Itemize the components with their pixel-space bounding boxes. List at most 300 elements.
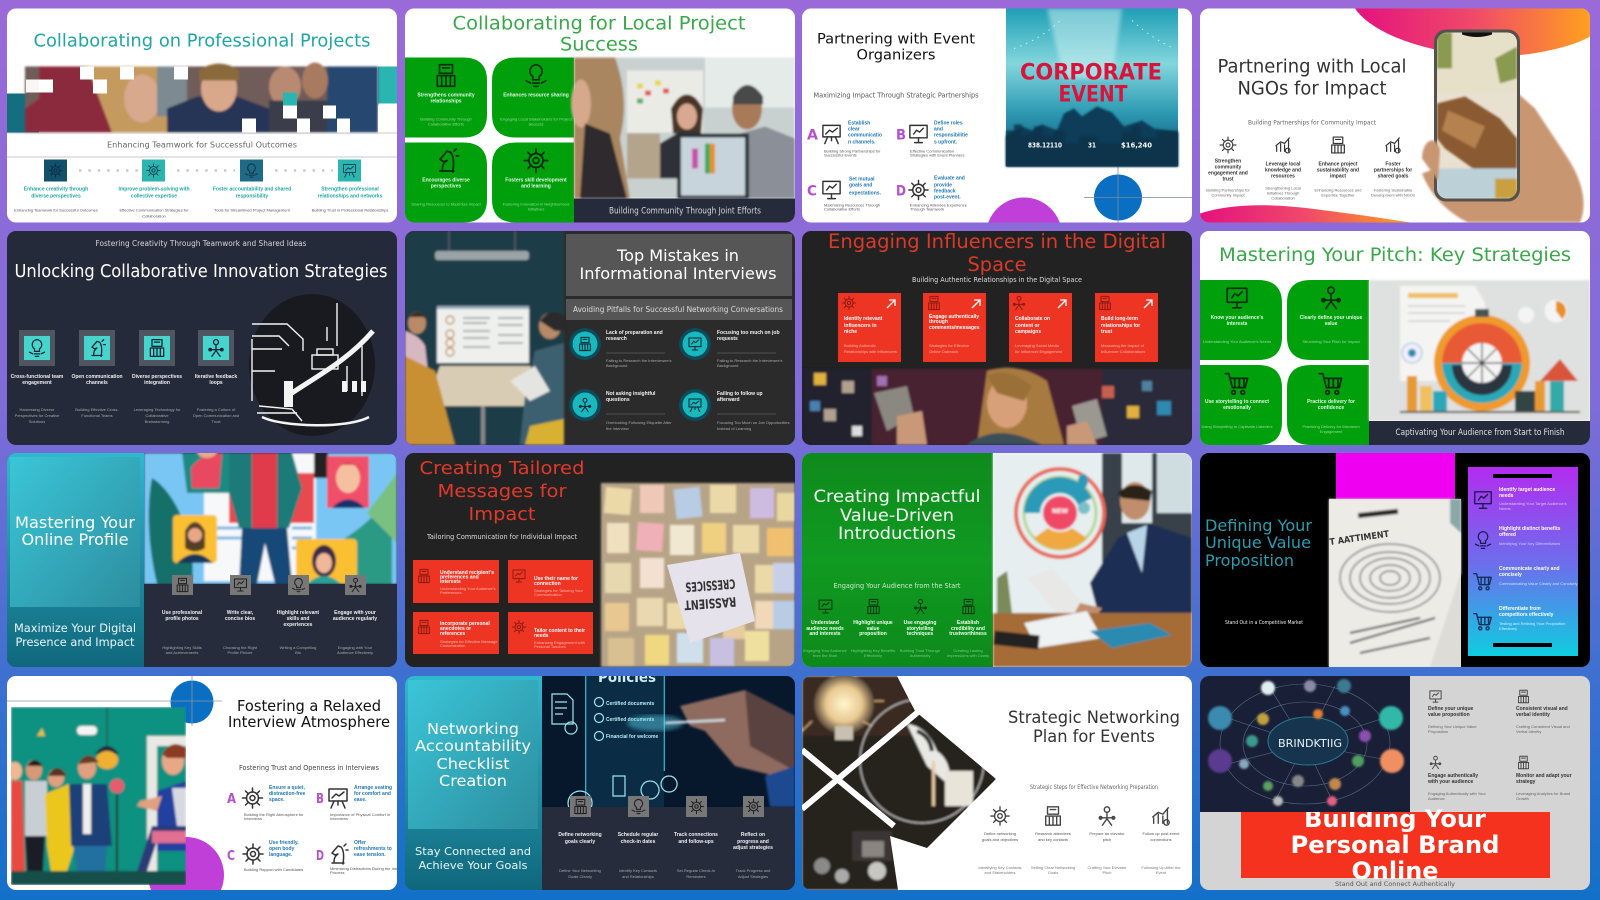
item: feedback: Open Communication and — [193, 413, 239, 418]
item: communicate — [1474, 566, 1578, 590]
title: Interview Atmosphere — [228, 713, 390, 731]
item: local knowledge — [1265, 138, 1301, 200]
card: preferences: Understanding Your Audience's — [440, 586, 495, 591]
item: reflect: Track Progress and — [736, 868, 770, 873]
item C — [227, 840, 303, 872]
item: cross-functional: engagement — [22, 380, 52, 386]
title: Checklist — [436, 755, 510, 773]
item: pitch: Crafting Your Elevator — [1088, 865, 1127, 870]
team photo banner — [7, 62, 397, 132]
tile: resources: Enhances resource sharing — [503, 92, 569, 98]
subtitle: Fostering Trust and Openness in Interviews — [239, 764, 379, 772]
title: Value-Driven — [840, 506, 954, 525]
item: sustainability: Expertise Together — [1321, 192, 1355, 198]
panel: Networking Accountability Checklist Creation — [405, 670, 795, 890]
item: engagement — [1206, 137, 1250, 198]
photo: woman with tablets — [802, 368, 1192, 445]
item: engage — [1427, 756, 1486, 801]
item: define goals: Define networking — [984, 831, 1016, 836]
item: follow up: Follow up post-event — [1143, 831, 1180, 836]
item A: Ensure a quiet, — [269, 785, 305, 791]
tile: audience: Understanding Your Audience's Needs — [1203, 339, 1271, 344]
tile: perspectives: perspectives — [431, 184, 462, 190]
card: anecdotes — [413, 612, 499, 654]
title: Partnering with Event — [817, 32, 975, 48]
tile: storytelling — [1202, 374, 1272, 429]
photo: sticky note wall — [601, 483, 795, 667]
card: anecdotes: references — [440, 631, 466, 637]
item: insightful questions: questions — [606, 397, 630, 403]
item: feedback — [193, 330, 239, 424]
card: preferences — [413, 560, 499, 603]
item: engagement: community — [1215, 164, 1242, 170]
item: storytelling: techniques — [907, 631, 933, 637]
subtitle: Engaging Your Audience from the Start — [834, 582, 961, 590]
card: engage: Online Outreach — [929, 349, 958, 354]
subtitle: Maximize Your Digital — [14, 621, 136, 635]
card: engage: Strategies for Effective — [929, 343, 970, 348]
item: connections — [674, 796, 718, 879]
item: connections: Track connections — [674, 832, 718, 838]
tile: resources — [500, 65, 573, 126]
red title box: Personal Brand — [1290, 831, 1500, 859]
item: reflect: Adjust Strategies — [738, 874, 768, 879]
item: audience — [803, 600, 848, 658]
gradient panel — [1468, 467, 1578, 656]
item: bios: Write clear, — [227, 610, 254, 616]
item: define goals: and Stakeholders — [984, 870, 1016, 875]
item A: space. — [269, 797, 285, 803]
magenta block — [1336, 453, 1455, 500]
illustration: people at interview — [8, 707, 186, 885]
card: name: Communication — [534, 592, 562, 597]
title: Defining Your — [1205, 516, 1312, 535]
card: identify: influencers in — [844, 323, 877, 329]
tile: community: Strengthens community — [417, 92, 475, 98]
item: skills: Highlight relevant — [277, 610, 319, 616]
kicker: Fostering Creativity Through Teamwork and Shared Ideas — [96, 239, 306, 248]
item: research — [1031, 807, 1075, 875]
item D — [896, 176, 968, 212]
card: collaborate: for Influencer Engagement — [1015, 349, 1063, 354]
item: differentiate: Differentiate from — [1499, 606, 1541, 612]
item: storytelling: Authenticity — [910, 653, 930, 658]
caption bar — [574, 198, 795, 222]
item: monitor: strategy — [1516, 779, 1536, 785]
panel: Defining Your Unique Value Proposition — [1200, 453, 1590, 667]
item: benefits: offered — [1499, 532, 1516, 538]
title: Accountability — [415, 737, 531, 755]
item: differentiate: Testing and Refining Your Proposition — [1499, 621, 1566, 626]
item: credibility: Establish — [957, 620, 979, 626]
item D: ease tension. — [354, 852, 386, 858]
tile: value: Structuring Your Pitch for Impact — [1302, 339, 1361, 344]
item B: B — [896, 128, 906, 144]
item A: Establish — [848, 120, 870, 126]
item: engagement: Building Partnerships for — [1206, 188, 1250, 192]
item D: post-event. — [934, 194, 961, 200]
item: diverse perspectives: Collaborative — [145, 413, 169, 418]
item: communicate: Communicate clearly and — [1499, 566, 1560, 572]
item: communicate: concisely — [1499, 572, 1522, 578]
panel: Collaborating for Local Project Success — [405, 8, 795, 222]
item: audience: from the Start — [813, 653, 838, 658]
item: reflect — [733, 796, 773, 879]
item: reflect: Reflect on — [741, 832, 765, 838]
item: shared goals: shared goals — [1378, 174, 1409, 180]
title: Success — [560, 34, 638, 56]
gradient blobs — [1200, 8, 1590, 222]
item: problem solving — [118, 160, 190, 218]
photo: man with marketing wheel: NEW — [1052, 508, 1068, 515]
title box: Informational Interviews — [580, 264, 776, 283]
item: follow up: afterward — [717, 397, 740, 403]
item A: A — [807, 128, 818, 144]
item: target audience: Needs — [1499, 506, 1511, 511]
photo: digital checklist and hand: Policies — [598, 670, 656, 686]
item: goals: Goals Clearly — [568, 874, 592, 879]
item: insightful questions: Not asking insightful — [606, 391, 656, 397]
title box: Top Mistakes in — [616, 246, 739, 265]
item: communication: channels — [86, 380, 108, 386]
title: Collaborating on Professional Projects — [34, 32, 370, 52]
tile: value — [1300, 287, 1363, 344]
item: follow up: Instead of Learning — [717, 426, 751, 431]
photo: man with marketing wheel — [993, 453, 1192, 667]
item: profile photos: Highlighting Key Skills — [162, 645, 202, 650]
item D: Through Teamwork — [910, 206, 944, 212]
item A: clear — [848, 126, 860, 132]
panel: Mastering Your Online Profile — [7, 444, 397, 667]
item: problem solving: Collaboration — [142, 214, 166, 218]
item: pitch — [1088, 807, 1127, 875]
item D: provide — [934, 182, 952, 188]
purple circle — [988, 198, 1060, 222]
title — [15, 513, 135, 549]
item: target audience: Understanding Your Target Audience's — [1499, 501, 1567, 506]
card: preferences: preferences and — [440, 574, 479, 580]
tile: audience — [1203, 288, 1271, 344]
tile: delivery: confidence — [1318, 405, 1344, 411]
illustration: online profile people — [144, 444, 397, 584]
green tiles — [1200, 280, 1369, 445]
item: value proposition — [851, 599, 895, 658]
item: monitor: Leveraging Analytics for Brand — [1516, 791, 1570, 796]
item C — [807, 176, 882, 212]
item: cross-functional: Perspectives for Creative — [15, 413, 60, 418]
card: relationships: Measuring the Impact of — [1101, 343, 1145, 348]
item C: Set mutual — [849, 176, 875, 182]
item: job requests — [679, 328, 782, 368]
card: engage: through — [929, 319, 948, 325]
item: communication: Building Effective Cross- — [75, 407, 119, 412]
item: problem solving: Effective Communication Strategies for — [119, 208, 189, 212]
tile: value: value — [1325, 321, 1338, 327]
card: relationships — [1095, 293, 1158, 362]
item: local knowledge: knowledge and — [1265, 168, 1301, 174]
card: identify: niche — [844, 329, 857, 335]
red title box: Building Your — [1304, 805, 1486, 833]
item: sustainability: Enhance project — [1319, 162, 1358, 168]
item: feedback: Iterative feedback — [195, 374, 237, 380]
tile: audience: Know your audience's — [1211, 315, 1264, 321]
item: sustainability: Enhancing Resources and — [1315, 188, 1361, 192]
item: research: Research attendees — [1035, 831, 1071, 836]
item: pitch: pitch — [1103, 837, 1111, 842]
item: define goals: goals and objectives — [982, 837, 1018, 842]
panel: Creating Impactful Value-Driven Introductions — [802, 453, 1192, 667]
blue circle with crosshair — [1084, 166, 1192, 222]
item B: and — [934, 126, 943, 132]
tile: skills: Fosters skill development — [505, 178, 567, 184]
title: Mastering Your Pitch: Key Strategies — [1219, 245, 1571, 266]
item: sustainability — [1315, 137, 1361, 198]
item: engage: with your audience — [1427, 779, 1474, 785]
item: engage — [333, 575, 377, 655]
card: identify: Identify relevant — [844, 316, 883, 322]
title — [814, 487, 980, 543]
tile: audience: interests — [1227, 321, 1248, 327]
item: skills — [277, 575, 319, 655]
item: job requests: Focusing too much on job — [717, 330, 780, 336]
item: value proposition: Proposition — [1428, 729, 1448, 734]
tile: skills: Initiatives — [528, 206, 544, 212]
card: name: Strategies for Tailoring Your — [534, 588, 584, 593]
title — [1205, 516, 1312, 570]
item: audience: and interests — [809, 631, 841, 637]
card: anecdotes: Incorporate personal — [440, 621, 490, 627]
item C: Use friendly, — [269, 840, 299, 846]
item: visual identity: verbal identity — [1516, 712, 1550, 718]
item: follow up — [679, 389, 790, 431]
item B: Effective Communication — [910, 148, 954, 154]
item: reflect: progress and — [737, 839, 769, 845]
card: anecdotes: Strategies for Effective Message — [440, 639, 498, 644]
red title box — [1241, 805, 1550, 885]
item: engagement: Community Impact — [1211, 192, 1246, 198]
item: audience: Engaging Your Audience — [803, 648, 848, 653]
title: Proposition — [1205, 551, 1294, 570]
subtitle — [14, 621, 136, 649]
item: value proposition: value — [867, 626, 880, 632]
item: preparation — [569, 328, 671, 368]
title: Space — [968, 253, 1026, 276]
item: storytelling: Building Trust Through — [900, 648, 940, 653]
title: Mastering Your — [15, 513, 135, 532]
tile: skills — [503, 149, 569, 212]
item: target audience — [1475, 487, 1567, 511]
subtitle box: Avoiding Pitfalls for Successful Networking Conversations — [573, 305, 783, 314]
item C: Building Rapport with Candidates — [244, 867, 303, 872]
tile: delivery — [1302, 374, 1360, 434]
item D: Process — [330, 870, 344, 875]
panel: Top Mistakes in Informational Interviews — [405, 231, 795, 445]
item B: for comfort and — [354, 791, 391, 797]
item: follow up: Failing to follow up — [717, 391, 763, 397]
item: connections: and follow-ups — [678, 839, 714, 845]
item: differentiate — [1474, 606, 1566, 631]
item: problem solving: collective expertise — [131, 194, 177, 200]
item: preparation: Background — [606, 363, 627, 368]
item: value proposition: Defining Your Unique Value — [1428, 724, 1477, 729]
item: profile photos: Use professional — [162, 610, 203, 616]
item: check-ins: check-in dates — [621, 839, 656, 845]
card: collaborate: campaigns — [1015, 329, 1041, 335]
tile: community: relationships — [430, 98, 462, 104]
poster: corporate event: 31 — [1088, 142, 1096, 150]
item: connections: Set Regular Check-In — [677, 868, 715, 873]
item: follow up: Event — [1156, 870, 1167, 875]
infographic image: branding network — [1200, 676, 1410, 812]
item: engagement: engagement and — [1208, 170, 1248, 176]
title: Fostering a Relaxed — [237, 697, 381, 715]
item: reflect: adjust strategies — [733, 845, 773, 851]
item: insightful questions: Overlooking Following Etiquette After — [606, 420, 672, 425]
item B: Interviews — [330, 816, 348, 821]
item: engage: audience regularly — [333, 616, 377, 622]
item: engagement: trust — [1222, 176, 1234, 182]
tile: skills: Fostering Innovation in Neighborhood — [503, 202, 569, 206]
tile: resources: Engaging Local Stakeholders for Project — [500, 116, 573, 122]
item D: Minimizing Distractions During the Interview — [330, 866, 408, 871]
item: creativity: Enhance creativity through — [24, 186, 88, 192]
title: Strategic Networking — [1008, 708, 1180, 728]
item: skills: Bio — [295, 650, 302, 655]
item B — [316, 785, 392, 821]
card: name: Use their name for — [534, 576, 578, 582]
item: insightful questions — [569, 389, 672, 431]
item: check-ins: and Relationships — [622, 874, 654, 879]
tile: community: Building Community Through — [420, 116, 472, 122]
card: engage: comments/messages — [929, 325, 980, 331]
item: storytelling — [900, 599, 940, 658]
item: bios: Profile Picture — [228, 650, 253, 655]
item: communication: Open communication — [71, 374, 123, 380]
card: identify — [838, 293, 901, 362]
item: shared goals: Foster — [1385, 162, 1401, 168]
tile: community: Collaborative Efforts — [428, 122, 464, 126]
poster: corporate event: $16,240 — [1121, 142, 1152, 150]
item: differentiate: Effectively — [1499, 626, 1517, 631]
title: Impact — [468, 504, 536, 525]
subtitle: Achieve Your Goals — [418, 859, 528, 872]
item: sustainability: sustainability and — [1317, 168, 1359, 174]
purple circle — [148, 837, 224, 900]
item D — [316, 840, 408, 875]
item: diverse perspectives: Diverse perspectives — [132, 374, 182, 380]
title: Creating Tailored — [420, 458, 584, 479]
item: shared goals — [1371, 138, 1415, 198]
item B: ease. — [354, 797, 367, 803]
photo: digital checklist and hand — [542, 670, 795, 815]
tile: perspectives: Sharing Resources to Maximize Impact — [411, 202, 482, 206]
item C: C — [227, 849, 235, 864]
item: diverse perspectives — [132, 330, 182, 424]
title: Creating Impactful — [814, 487, 980, 506]
item: job requests: Failing to Research the Interviewee's — [717, 358, 782, 363]
item: credibility: Creating Lasting — [953, 648, 983, 653]
item: goals: goals clearly — [565, 839, 595, 845]
item: follow up — [1141, 808, 1181, 875]
card: collaborate: Collaborate on — [1015, 316, 1050, 322]
item: goals: Define networking — [558, 832, 602, 838]
photo: meeting room — [405, 231, 564, 445]
panel: Strategic Networking Plan for Events — [802, 674, 1192, 890]
item: cross-functional: Cross-functional team — [11, 374, 64, 380]
item: creativity: diverse perspectives — [31, 194, 81, 200]
item: job requests: requests — [717, 336, 738, 342]
item: relationships: Strengthen professional — [321, 186, 379, 192]
item: feedback: Fostering a Culture of — [197, 407, 236, 412]
title: Online Profile — [22, 530, 128, 549]
tile: perspectives — [411, 149, 482, 206]
photo: digital checklist and hand: Financial for welcome — [606, 734, 658, 740]
tile: community — [417, 65, 475, 126]
item: monitor: Growth — [1516, 796, 1529, 801]
subtitle: Stand Out and Connect Authentically — [1335, 880, 1455, 888]
subtitle: Maximizing Impact Through Strategic Partnerships — [814, 92, 979, 100]
card: collaborate: Leveraging Social Media — [1015, 343, 1060, 348]
card: preferences: Preferences — [440, 590, 462, 595]
white X dividers — [802, 712, 918, 826]
item: audience: Understand — [811, 620, 839, 626]
item A — [807, 120, 882, 158]
tile: delivery: Practice delivery for — [1307, 399, 1355, 405]
illustration: stopwatch gauge — [1369, 280, 1590, 421]
card: relationships: trust — [1101, 329, 1112, 335]
tile: storytelling: emotionally — [1223, 405, 1251, 411]
item: benefits: Identifying Your Key Differentiators — [1499, 541, 1560, 546]
card: anecdotes: anecdotes or — [440, 626, 471, 632]
item: value proposition: Effectively — [864, 653, 882, 658]
photo: sticky note wall: RASSIENT — [684, 593, 737, 612]
item: visual identity — [1516, 690, 1570, 734]
card: preferences: Understand recipient's — [440, 570, 494, 576]
card: collaborate — [1009, 293, 1072, 362]
panel: Partnering with Local NGOs — [1200, 8, 1590, 222]
card: name — [508, 560, 593, 603]
item: profile photos: and Achievements — [166, 650, 198, 655]
card: relationships: Influencer Collaborations — [1101, 349, 1145, 354]
item: accountability: Tools for Streamlined Project Management — [214, 208, 291, 212]
item: follow up: Following Up After the — [1141, 865, 1181, 870]
photo: meeting around laptop — [571, 58, 795, 198]
title: Unlocking Collaborative Innovation Strategies — [14, 262, 388, 282]
item: follow up: Focusing Too Much on Job Opportunities — [717, 420, 790, 425]
item: insightful questions: the Interview — [606, 426, 629, 431]
item: communicate: Communicating Value Clearly and Concisely — [1499, 581, 1578, 586]
item B: Arrange seating — [354, 785, 392, 791]
item A: A — [227, 792, 236, 807]
item: define goals: Identifying Key Contacts — [978, 865, 1022, 870]
item: engage: Audience Effectively — [337, 650, 373, 655]
item: diverse perspectives: integration — [144, 380, 170, 386]
card: content — [508, 612, 593, 654]
item A: Building the Right Atmosphere for — [244, 812, 304, 817]
title: Collaborating for Local Project — [452, 12, 746, 34]
subtitle: Stand Out in a Competitive Market — [1225, 620, 1304, 626]
item: shared goals: Development with NGOs — [1371, 192, 1415, 198]
item: preparation: Lack of preparation and — [606, 330, 663, 336]
item D: Enhancing Attendee Experience — [910, 202, 968, 208]
item: feedback: Trust — [212, 419, 221, 424]
card: content: Enhancing Engagement with — [534, 640, 585, 645]
item: shared goals: partnerships for — [1374, 168, 1412, 174]
item: skills: experiences — [284, 622, 313, 628]
panel: Unlocking Collaborative Innovation Strategies — [7, 231, 397, 445]
title — [828, 230, 1166, 276]
title — [454, 16, 746, 51]
